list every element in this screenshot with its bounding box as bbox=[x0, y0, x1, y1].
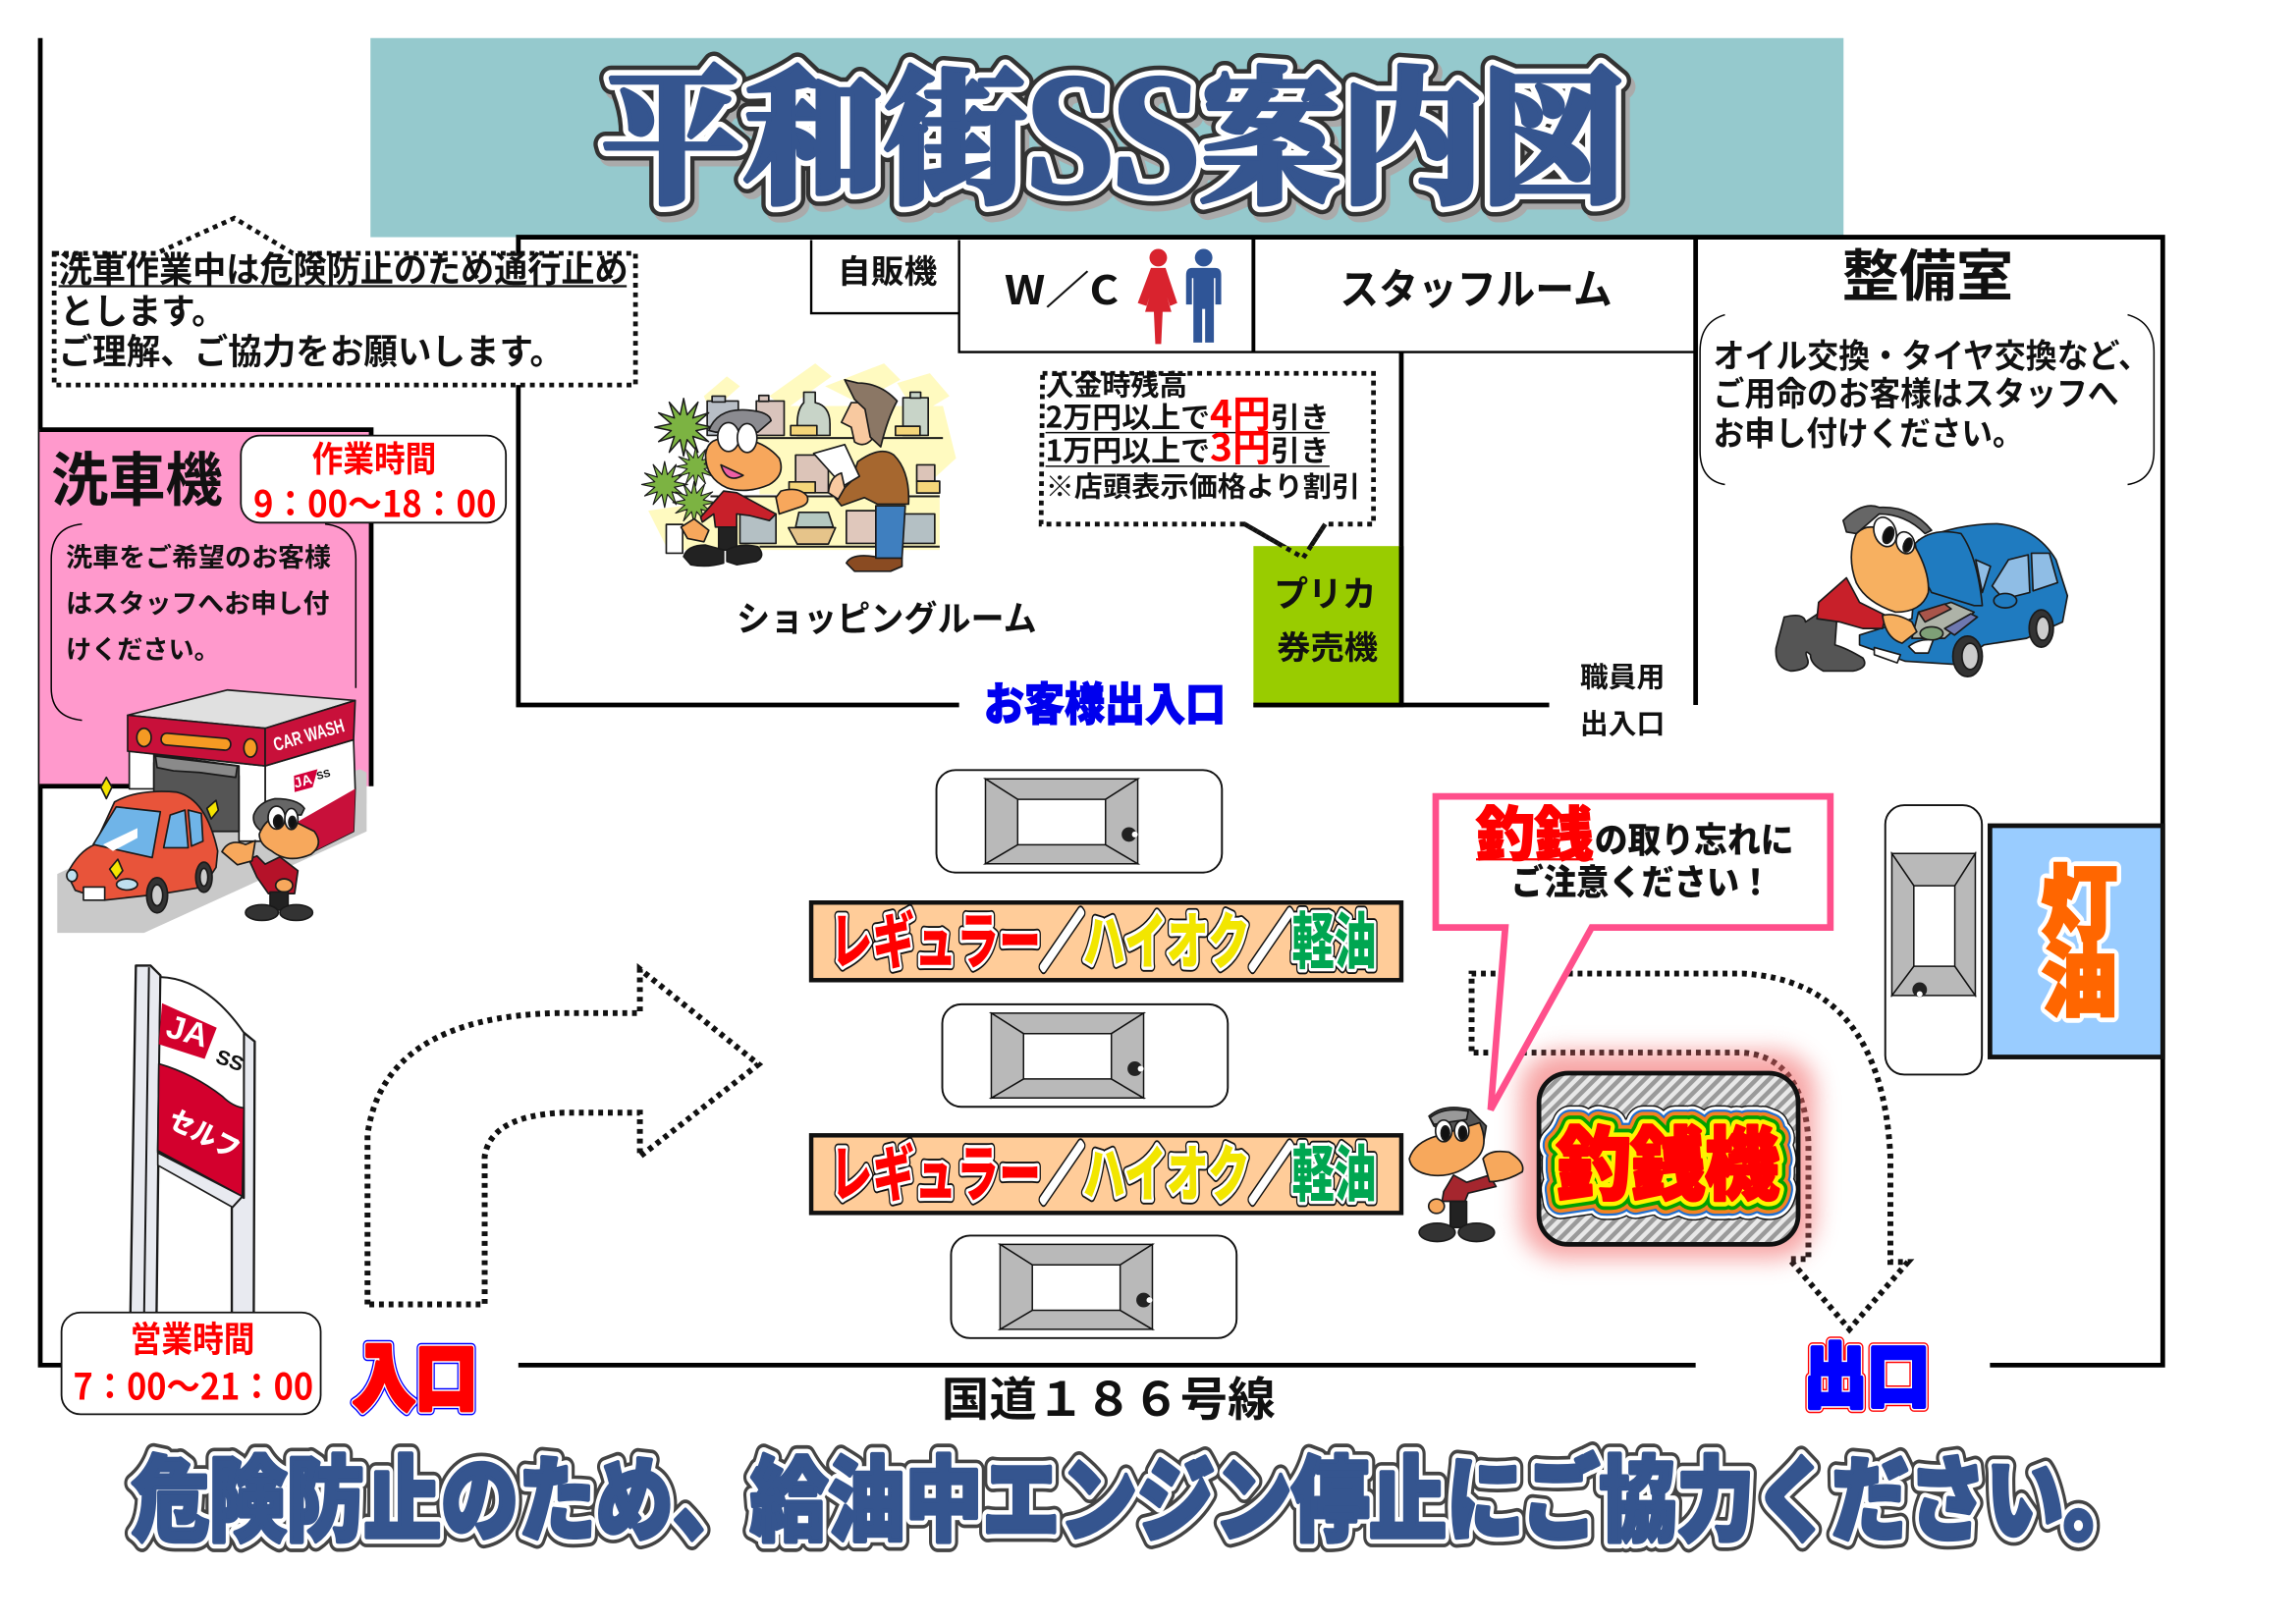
change machine glow bbox=[1520, 1052, 1816, 1259]
illustration: mascot checking car engine bbox=[1776, 506, 2067, 676]
fuel pump: second island: レギュラー／ハイオク／軽油 bbox=[830, 1125, 1377, 1215]
business hours box: 7：00～21：00 bbox=[74, 1357, 313, 1410]
fuel pump: second island: レギュラー／ハイオク／軽油 bbox=[830, 1125, 1377, 1215]
label: national route 186: 国道１８６号線 bbox=[942, 1362, 1276, 1430]
label: staff room: スタッフルーム bbox=[1339, 256, 1613, 317]
label: staff entrance: 職員用 bbox=[1580, 655, 1665, 695]
car: parked middle bbox=[943, 1004, 1228, 1107]
prepaid ticket machine: 券売機 bbox=[1277, 622, 1378, 669]
fuel pump: regular / high octane / diesel: レギュラー／ハイオク／軽油 bbox=[830, 893, 1377, 982]
car wash note: はスタッフへお申し付 bbox=[66, 582, 329, 621]
label: shopping room: ショッピングルーム bbox=[737, 591, 1037, 642]
change machine: 釣銭機 bbox=[1557, 1103, 1779, 1217]
label: vending machine: 自販機 bbox=[838, 246, 937, 293]
illustration: shopping room with mascot and customer bbox=[641, 363, 957, 571]
panel: notice about car wash bbox=[54, 218, 635, 385]
site walls and road boundary bbox=[40, 38, 2162, 1365]
panel: maintenance room: ご用命のお客様はスタッフへ bbox=[1714, 366, 2119, 415]
arrow: exit route bbox=[1472, 974, 1908, 1329]
car: parked top bbox=[937, 770, 1222, 873]
kerosene pump bbox=[1990, 826, 2162, 1057]
label: entrance: 入口 bbox=[353, 1321, 477, 1426]
business hours box bbox=[62, 1311, 321, 1414]
label: toilets: W／C bbox=[1005, 258, 1119, 316]
illustration: mascot waving bbox=[1409, 1108, 1523, 1242]
change machine: 釣銭機 bbox=[1557, 1103, 1779, 1217]
panel: car wash bbox=[39, 429, 371, 786]
kerosene pump: 灯 bbox=[2042, 839, 2117, 957]
label: staff entrance: 出入口 bbox=[1580, 702, 1665, 742]
kerosene pump: 油 bbox=[2042, 915, 2117, 1033]
change machine: 釣銭機 bbox=[1557, 1103, 1779, 1217]
panel: notice about car wash: とします。 bbox=[60, 284, 226, 335]
arrow: entry route bbox=[367, 969, 758, 1305]
illustration: car wash with car and mascot bbox=[57, 690, 366, 933]
panel: maintenance room: お申し付けください。 bbox=[1714, 406, 2024, 455]
fuel pump: second island: レギュラー／ハイオク／軽油 bbox=[830, 1125, 1377, 1215]
callout: prepaid discount bbox=[1041, 363, 1374, 558]
car wash note bbox=[51, 524, 355, 721]
change machine: 釣銭機 bbox=[1557, 1103, 1779, 1217]
callout: prepaid discount: 入金時残高 bbox=[1046, 363, 1187, 405]
label: entrance: 入口 bbox=[353, 1321, 477, 1426]
callout: don't forget your change: 釣銭 bbox=[1476, 788, 1594, 873]
car wash note: 洗車をご希望のお客様 bbox=[66, 536, 331, 574]
change machine: 釣銭機 bbox=[1557, 1103, 1779, 1217]
label: entrance: 入口 bbox=[353, 1321, 477, 1426]
callout: don't forget your change bbox=[1436, 788, 1831, 1109]
car: parked bottom bbox=[951, 1235, 1236, 1338]
callout: prepaid discount: 2万円以上で4円引き bbox=[1046, 384, 1330, 439]
kerosene pump: 油 bbox=[2042, 915, 2117, 1033]
sign pole: JA bbox=[162, 1008, 212, 1055]
callout: don't forget your change: ご注意ください！ bbox=[1511, 854, 1772, 905]
label: exit: 出口 bbox=[1804, 1320, 1930, 1422]
car: parked at kerosene bbox=[1886, 805, 1982, 1074]
kerosene pump: 灯 bbox=[2042, 839, 2117, 957]
heading: maintenance room: 整備室 bbox=[1842, 232, 2013, 312]
title band: 平和街SS案内図 bbox=[602, 22, 1624, 233]
sign pole: SS bbox=[213, 1046, 246, 1076]
car wash hours box bbox=[241, 431, 506, 527]
callout: prepaid discount: ※店頭表示価格より割引 bbox=[1046, 464, 1360, 505]
fuel pump: regular / high octane / diesel: レギュラー／ハイオク／軽油 bbox=[830, 893, 1377, 982]
label: customer entrance: お客様出入口 bbox=[984, 669, 1226, 734]
illustration: car wash with car and mascot: CAR WASH bbox=[271, 716, 347, 756]
illustration: car wash with car and mascot: JA bbox=[293, 772, 314, 792]
car wash note: けください。 bbox=[66, 628, 220, 667]
illustration: car wash with car and mascot: SS bbox=[315, 768, 332, 783]
label: toilets bbox=[1005, 248, 1222, 344]
icon: man bbox=[1186, 248, 1222, 343]
callout: don't forget your change: の取り忘れに bbox=[1595, 812, 1794, 863]
title band: 平和街SS案内図 bbox=[602, 22, 1624, 233]
prepaid ticket machine bbox=[1244, 524, 1401, 705]
panel: maintenance room bbox=[1700, 232, 2154, 485]
fuel pump: regular / high octane / diesel: レギュラー／ハイオク／軽油 bbox=[830, 893, 1377, 982]
car wash hours box: 9：00～18：00 bbox=[253, 474, 496, 527]
title band: 平和街SS案内図 bbox=[602, 22, 1624, 233]
sign pole bbox=[131, 965, 254, 1320]
sign pole: セルフ bbox=[163, 1098, 248, 1166]
title band bbox=[370, 22, 1843, 239]
prepaid ticket machine: プリカ bbox=[1274, 566, 1377, 617]
icon: woman bbox=[1138, 248, 1177, 344]
car wash hours box: 作業時間 bbox=[312, 431, 436, 482]
panel: maintenance room: オイル交換・タイヤ交換など、 bbox=[1714, 328, 2150, 377]
change machine bbox=[1539, 1073, 1798, 1244]
change machine: 釣銭機 bbox=[1557, 1103, 1779, 1217]
change machine: 釣銭機 bbox=[1557, 1103, 1779, 1217]
label: staff entrance bbox=[1580, 655, 1665, 742]
business hours box: 営業時間 bbox=[131, 1311, 254, 1362]
heading: car wash machine: 洗車機 bbox=[51, 434, 223, 518]
title band: 平和街SS案内図 bbox=[606, 27, 1628, 239]
panel: notice about car wash: ご理解、ご協力をお願いします。 bbox=[59, 324, 564, 375]
label: exit: 出口 bbox=[1804, 1320, 1930, 1422]
panel: notice about car wash: 洗車作業中は危険防止のため通行止め bbox=[59, 242, 629, 293]
callout: prepaid discount: 1万円以上で3円引き bbox=[1046, 418, 1330, 473]
label: exit: 出口 bbox=[1804, 1320, 1930, 1422]
